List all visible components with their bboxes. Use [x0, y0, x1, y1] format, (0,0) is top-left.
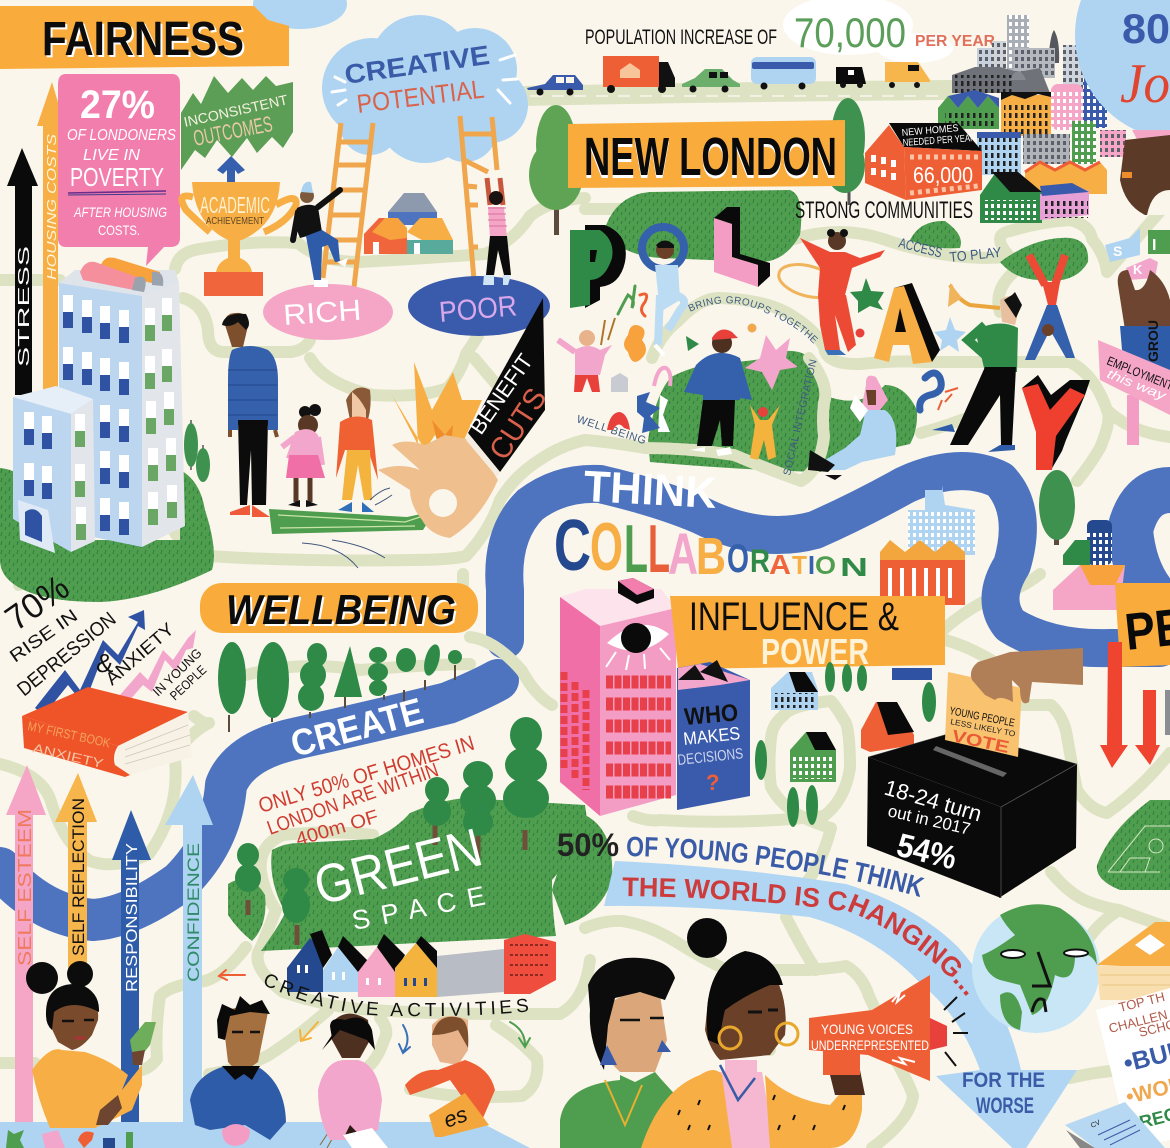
- wellbeing road label: WELL BEING: [575, 413, 648, 447]
- inconsistent outcomes sign: INCONSISTENT: [182, 91, 290, 130]
- wellbeing banner: WELLBEING: [226, 586, 456, 633]
- red down arrows: [1100, 642, 1160, 768]
- collaboration lettering: R: [750, 543, 770, 579]
- influence and power banner: INFLUENCE &: [689, 595, 899, 639]
- megaphone: YOUNG VOICES: [821, 1021, 913, 1037]
- navy building and houses: [1053, 520, 1125, 610]
- only 50 percent text: LONDON ARE WITHIN: [264, 759, 441, 840]
- ballot box: [867, 731, 1077, 898]
- power banner right: [1115, 583, 1170, 667]
- anxiety text: PEOPLE: [167, 662, 209, 703]
- hand top right: [1120, 130, 1170, 215]
- zigzag arrow pink: [120, 630, 196, 702]
- house row: [287, 930, 556, 997]
- green hills: [0, 190, 1088, 951]
- self reflection arrow: [55, 773, 97, 970]
- of young people think: OF YOUNG PEOPLE THINK: [627, 836, 925, 897]
- anxiety text: ANXIETY: [102, 619, 178, 689]
- letter L: [714, 207, 770, 287]
- rich ellipse: [263, 284, 393, 340]
- explosion: [392, 362, 482, 458]
- anxiety text: &: [96, 648, 113, 678]
- benefit cuts tag: BENEFIT: [465, 349, 538, 439]
- poverty callout: [58, 74, 180, 266]
- blue car: [527, 75, 583, 96]
- blue circle top right: 80: [1122, 5, 1170, 52]
- benefit cuts tag: CUTS: [483, 382, 553, 466]
- cloud fragment top: [253, 0, 347, 29]
- poverty callout: POVERTY: [70, 162, 164, 192]
- employment sign: GROU: [1145, 320, 1161, 362]
- world is changing arrow band: [604, 861, 1077, 1148]
- new london banner: [568, 120, 845, 190]
- hand voting: [971, 648, 1083, 703]
- who makes decisions building: MAKES: [682, 723, 741, 749]
- rich ellipse: RICH: [282, 295, 362, 332]
- girl with sticks: [558, 318, 615, 392]
- globe: [972, 904, 1100, 1033]
- anxiety text: IN YOUNG: [150, 645, 205, 699]
- 70,000 per year: 70,000: [794, 9, 906, 56]
- creative potential cloud: POTENTIAL: [355, 74, 486, 119]
- blue circle top right: [1075, 0, 1170, 140]
- school house right: CHALLEN: [1107, 1007, 1169, 1036]
- responsibility arrow: [112, 810, 151, 1122]
- play letters: [570, 207, 1090, 470]
- inconsistent outcomes sign: OUTCOMES: [191, 111, 274, 151]
- who makes decisions building: [677, 660, 750, 810]
- confidence arrow: [165, 775, 213, 1122]
- vote slip: LESS LIKELY TO: [950, 717, 1016, 739]
- pink house: [1040, 183, 1089, 220]
- tree by road: [529, 105, 583, 235]
- create text: CREATE: [286, 690, 427, 765]
- man with child: [684, 330, 752, 456]
- big building: [59, 270, 185, 547]
- fairness banner: [0, 6, 289, 69]
- collaboration lettering: L: [648, 511, 670, 587]
- school house right: [1096, 922, 1170, 1148]
- only 50 percent text: ONLY 50% OF HOMES IN: [256, 732, 477, 818]
- anxiety book: MY FIRST BOOK: [26, 718, 112, 750]
- collaboration lettering: I: [808, 550, 815, 580]
- woman in pink sweater: [318, 1014, 382, 1148]
- man in red sweater: es: [440, 1101, 471, 1133]
- riverside buildings: [880, 485, 975, 605]
- only 50 percent text: 400m OF: [293, 807, 381, 851]
- stress arrow: STRESS: [16, 246, 33, 367]
- main road with lane markings: [525, 90, 950, 96]
- poor ellipse: [408, 276, 550, 336]
- eye: [606, 623, 670, 670]
- for the worse: FOR THE: [962, 1069, 1045, 1092]
- access to play: [897, 234, 1003, 265]
- road crossing between rivers: [470, 637, 552, 705]
- strong communities: STRONG COMMUNITIES: [795, 197, 973, 224]
- skills blocks: S: [1113, 243, 1122, 259]
- river: create: [0, 680, 498, 920]
- benefit cuts tag: [465, 298, 553, 477]
- tree beside new london: [825, 98, 865, 205]
- ballot box: out in 2017: [886, 801, 972, 839]
- the world is changing: THE WORLD IS CHANGING...: [622, 877, 969, 996]
- small houses and trees: [771, 672, 914, 782]
- stress arrow: [7, 148, 38, 395]
- green space text: GREEN: [308, 817, 488, 917]
- removal truck: [603, 56, 675, 93]
- influence and power banner: POWER: [761, 631, 869, 672]
- tree pair by building: [184, 420, 210, 482]
- grey bucket right: [1165, 690, 1170, 735]
- academic achievement trophy: [182, 182, 296, 296]
- collaboration lettering: L: [624, 511, 648, 587]
- access to play: ACCESS: [897, 234, 944, 261]
- yellow van: [885, 62, 930, 88]
- blue star: [934, 317, 966, 352]
- fairness banner: FAIRNESS: [42, 13, 244, 66]
- who makes decisions building: ?: [706, 770, 719, 795]
- new london banner: NEW LONDON: [584, 127, 837, 187]
- hula hoop girl: [775, 229, 885, 355]
- academic achievement trophy: ACHIEVEMENT: [206, 216, 264, 227]
- collaboration lettering: T: [792, 550, 807, 580]
- anxiety book: ANXIETY: [31, 740, 105, 771]
- who makes decisions building: DECISIONS: [677, 745, 744, 769]
- 70 percent text: RISE IN: [6, 605, 81, 666]
- 70 percent text: [0, 568, 120, 701]
- self reflection arrow: SELF REFLECTION: [69, 798, 88, 956]
- wellbeing banner: WELLBEING: [228, 588, 458, 635]
- man with green shirt: [560, 958, 680, 1148]
- trees of green space: [235, 717, 549, 945]
- employment sign: this way: [1105, 366, 1170, 404]
- anxiety text: [96, 619, 209, 703]
- letter Y: [1022, 375, 1090, 470]
- green space text: SPACE: [349, 881, 488, 936]
- new homes house: [865, 123, 982, 200]
- ballot box: 18-24 turn: [882, 775, 985, 826]
- child in yellow: [750, 405, 780, 460]
- woman with megaphone: [641, 918, 865, 1148]
- letter A: [874, 283, 940, 364]
- responsibility arrow: RESPONSIBILITY: [124, 843, 141, 992]
- poverty callout: 27%: [80, 83, 155, 127]
- girl in red top: [336, 388, 378, 512]
- skills blocks: I: [1152, 237, 1156, 254]
- housing costs arrow: HOUSING COSTS: [44, 134, 59, 280]
- woman in orange sweater: [26, 961, 156, 1128]
- green car: [682, 69, 740, 92]
- girl in pink: [282, 404, 325, 507]
- influence and power banner: [670, 595, 945, 672]
- collaboration lettering: A: [668, 522, 698, 587]
- only 50 percent text: [256, 732, 477, 851]
- influence pink tower: [560, 578, 676, 816]
- new homes house: NEEDED PER YEAR: [902, 133, 976, 149]
- megaphone sound lines: [944, 997, 968, 1066]
- rooftop rolls: [80, 257, 163, 292]
- woman in hijab reading: [808, 376, 896, 480]
- table: [0, 1122, 530, 1148]
- poverty callout: LIVE IN: [83, 147, 140, 164]
- megaphone: UNDERREPRESENTED: [811, 1037, 929, 1053]
- poor ellipse: POOR: [438, 290, 518, 329]
- self esteem arrow: SELF ESTEEM: [15, 809, 35, 966]
- row of trees: [218, 642, 462, 732]
- skills blocks: K: [1133, 262, 1143, 277]
- person climbing poor: [483, 178, 511, 285]
- trumpet player: [932, 283, 1022, 452]
- small trees: [755, 662, 936, 827]
- ballot box: 54%: [893, 826, 960, 876]
- black van: [836, 67, 866, 88]
- handstand person: [1025, 255, 1075, 360]
- vote slip: VOTE: [950, 726, 1011, 757]
- academic achievement trophy: ACADEMIC: [200, 192, 270, 218]
- ladder left: [323, 123, 373, 287]
- access to play: TO PLAY: [949, 244, 1003, 265]
- collaboration lettering: A: [769, 549, 791, 580]
- zigzag arrow blue: [35, 610, 145, 715]
- bus: [751, 57, 816, 90]
- poverty callout: AFTER HOUSING: [73, 204, 167, 220]
- think text: THINK: [582, 462, 718, 518]
- cv paper: CV: [1090, 1119, 1102, 1130]
- 50 percent text: 50%: [557, 827, 619, 863]
- creative potential cloud: [322, 15, 528, 163]
- small arrows: [219, 970, 530, 1053]
- for the worse: WORSE: [976, 1093, 1034, 1118]
- decorative shapes: [607, 325, 958, 433]
- ladder right: [460, 116, 497, 280]
- hand with rug: [378, 435, 498, 538]
- collaboration lettering: O: [727, 537, 749, 581]
- 70 percent text: DEPRESSION: [13, 608, 120, 701]
- who makes decisions building: WHO: [683, 699, 739, 731]
- new homes house: 66,000: [913, 162, 973, 188]
- self esteem arrow: [6, 765, 46, 1122]
- squiggles near O: [618, 286, 647, 316]
- window grid: [606, 682, 671, 792]
- creative potential cloud: CREATIVE: [343, 40, 491, 90]
- football pitch: [1097, 800, 1170, 890]
- white cloud behind 70000: [783, 0, 953, 63]
- collaboration lettering: O: [590, 509, 623, 585]
- man in red sweater: [343, 1016, 495, 1148]
- school house right: TOP TH: [1117, 989, 1166, 1015]
- collaboration lettering: N: [840, 552, 868, 582]
- 70 percent text: 70%: [0, 568, 76, 639]
- windows: [63, 295, 177, 535]
- green house: [980, 172, 1042, 223]
- employment sign: [1098, 320, 1170, 445]
- arrow: achievement to outcomes: [217, 156, 245, 182]
- 70,000 per year: PER YEAR: [915, 33, 995, 50]
- vote slip: YOUNG PEOPLE: [948, 705, 1016, 730]
- man in blue shirt: [190, 996, 286, 1146]
- population text: POPULATION INCREASE OF: [585, 26, 777, 49]
- vehicles: [527, 56, 930, 96]
- housing costs arrow: [37, 82, 65, 390]
- inconsistent outcomes sign: [181, 76, 293, 170]
- person climbing rich: [293, 182, 348, 287]
- tree right of river: [1039, 470, 1075, 545]
- person making O shape: [642, 227, 684, 355]
- collaboration lettering: [554, 506, 868, 587]
- man in blue sweater: [222, 313, 278, 517]
- anxiety book: [22, 687, 192, 777]
- new london banner: NEW LONDON: [584, 130, 837, 190]
- bring groups together: [688, 296, 818, 344]
- skills blocks: [1105, 228, 1170, 280]
- motion lines: [302, 488, 392, 568]
- green star: [850, 278, 884, 313]
- houses between ladders: [364, 193, 453, 254]
- colourful row houses: [938, 78, 1126, 194]
- social integration label: SOCIAL INTEGRATION: [781, 358, 820, 477]
- poverty callout: COSTS.: [98, 222, 140, 238]
- megaphone: [809, 975, 947, 1081]
- confidence arrow: CONFIDENCE: [184, 843, 203, 982]
- rug: [269, 509, 435, 534]
- small building: [13, 386, 95, 553]
- letter P: [570, 225, 626, 308]
- fairness banner: FAIRNESS: [44, 15, 246, 68]
- bring groups together: BRING GROUPS TOGETHER: [688, 296, 818, 344]
- for the worse: [962, 1069, 1045, 1118]
- hand holding block: [1118, 270, 1170, 385]
- dots: [748, 324, 864, 338]
- creative activities text: CREATIVE ACTIVITIES: [264, 974, 528, 1016]
- collaboration lettering: B: [696, 528, 726, 586]
- vote slip: [945, 672, 1022, 757]
- new homes house: NEW HOMES: [901, 123, 959, 139]
- collaboration lettering: O: [815, 552, 836, 580]
- 70,000 per year: [794, 9, 995, 56]
- cv paper: [1065, 1102, 1165, 1148]
- collaboration lettering: C: [554, 506, 591, 586]
- river: think: [504, 471, 1170, 648]
- social integration road over hill: [585, 358, 825, 481]
- city skyline: [952, 15, 1087, 93]
- poverty callout: OF LONDONERS: [67, 127, 176, 144]
- pink burst: [745, 335, 798, 390]
